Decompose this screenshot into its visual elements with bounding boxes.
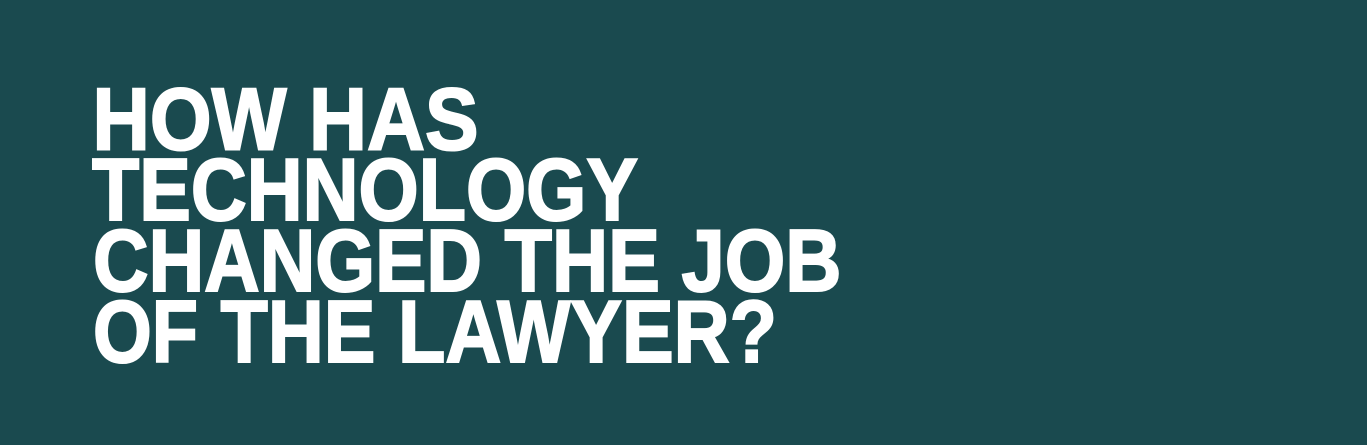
title: THE <box>220 282 376 381</box>
title: OF <box>93 282 198 381</box>
title: THE <box>504 211 660 310</box>
title: JOB <box>682 211 842 310</box>
title: LAWYER? <box>398 282 777 381</box>
title <box>92 69 842 381</box>
title: HAS <box>309 69 478 168</box>
title: TECHNOLOGY <box>92 140 638 239</box>
title: CHANGED <box>93 211 482 310</box>
title: HOW <box>92 69 287 168</box>
